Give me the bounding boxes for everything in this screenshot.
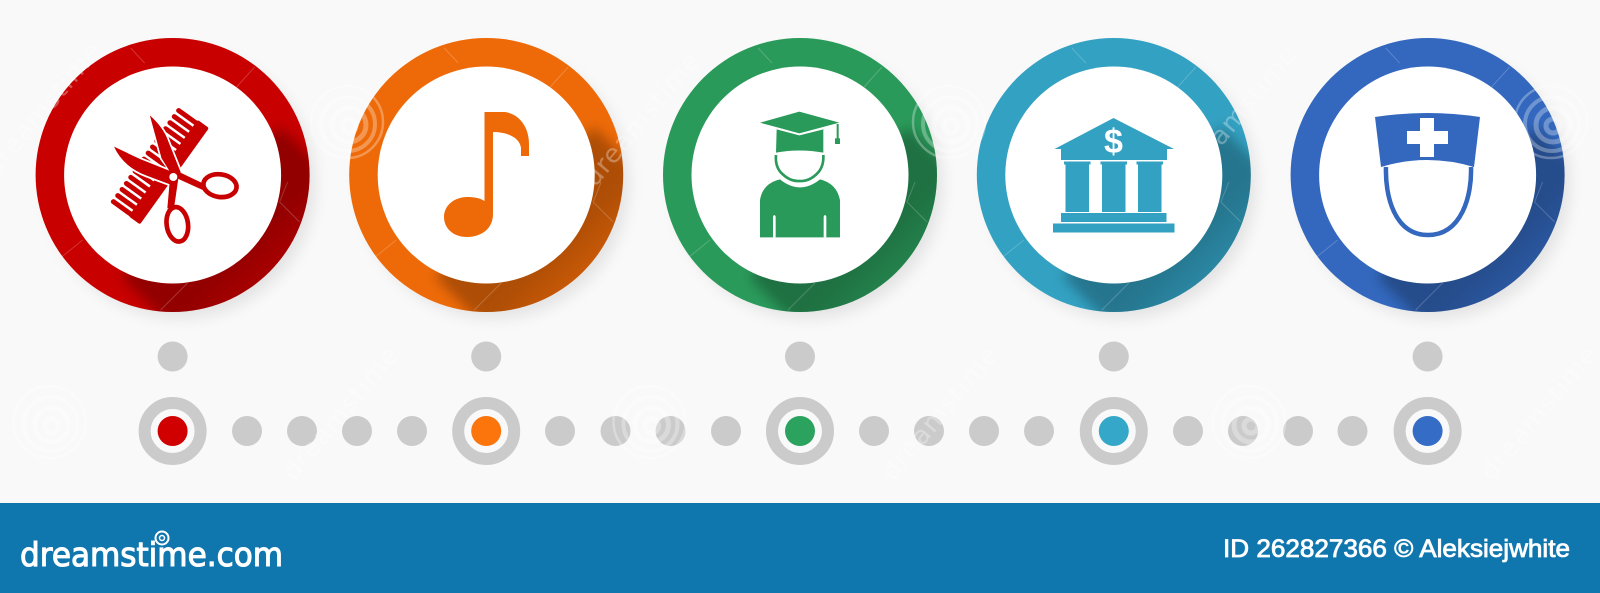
watermark overlay <box>0 37 1600 486</box>
icon: nurse cap and veil <box>1375 113 1480 235</box>
timeline node: red <box>145 403 201 459</box>
timeline node: orange <box>458 403 514 459</box>
timeline node: green <box>772 403 828 459</box>
green ring <box>663 38 944 320</box>
blue ring <box>1290 38 1572 320</box>
badge 5: blue nurse <box>1290 38 1572 320</box>
timeline: small grey dots <box>232 416 1368 446</box>
watermark overlay: dreamstime <box>577 47 706 192</box>
orange ring <box>349 38 630 320</box>
image ID and author: ID 262827366 © Aleksiejwhite <box>1223 535 1570 563</box>
dreamstime logo text: dreamstime.com <box>20 535 283 574</box>
icon: graduate <box>760 112 840 237</box>
watermark overlay: dreamstime <box>1174 41 1303 186</box>
badge 4: teal bank <box>976 38 1258 320</box>
timeline: connector dots above rings <box>158 342 1443 372</box>
badge 1: red scissors and comb <box>36 38 317 320</box>
footer banner <box>0 503 1600 593</box>
icon: music note <box>444 112 529 237</box>
watermark overlay: dreamstime <box>875 341 1004 486</box>
watermark overlay: dreamstime <box>276 341 405 486</box>
icon: bank: $ <box>1104 123 1123 161</box>
icon: scissors and comb <box>112 108 238 243</box>
teal ring <box>976 38 1258 320</box>
timeline node: blue <box>1400 403 1456 459</box>
icon: bank <box>1053 118 1174 232</box>
watermark overlay: dreamstime <box>1474 341 1600 486</box>
timeline node: teal <box>1086 403 1142 459</box>
red ring <box>36 38 317 320</box>
badge 2: orange music note <box>349 38 630 320</box>
badge 3: green graduate <box>663 38 944 320</box>
